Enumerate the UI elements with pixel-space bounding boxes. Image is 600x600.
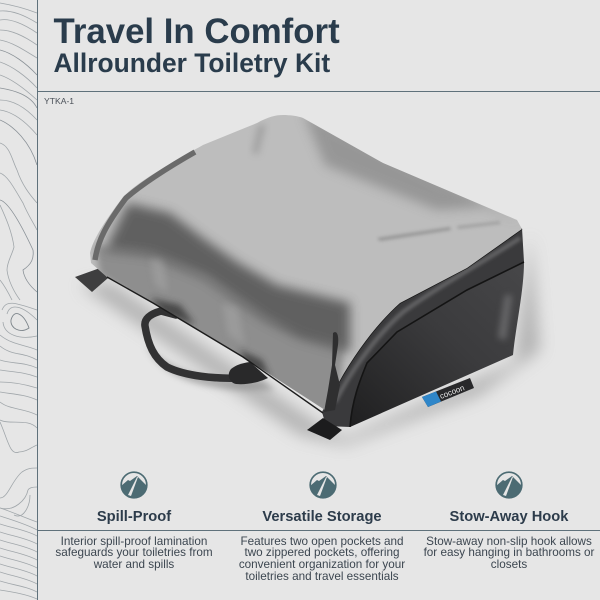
- heading: spill-proof: Spill-Proof: [97, 508, 171, 524]
- heading: versatile storage: Versatile Storage: [262, 508, 382, 524]
- zipper pull: [324, 332, 340, 412]
- bottom seam: [107, 277, 323, 413]
- heading: stow-away hook: Stow-Away Hook: [450, 508, 568, 524]
- text: versatile storage description: two zippered pockets, offering: [244, 546, 400, 559]
- top panel: [90, 115, 522, 410]
- zipper band: [322, 228, 524, 427]
- cast shadows: [80, 235, 540, 445]
- left seam: [95, 152, 195, 260]
- text: versatile storage description: toiletries and travel essentials: [245, 570, 399, 583]
- text: stow-away hook description: closets: [491, 558, 527, 571]
- top panel shading: [95, 112, 522, 420]
- product photo: toiletry bag: [75, 115, 547, 450]
- brand label: cocoon: [438, 383, 466, 401]
- subtitle: Allrounder Toiletry Kit: [54, 48, 330, 78]
- text: stow-away hook description: Stow-away non-slip hook allows: [426, 534, 592, 548]
- text: spill-proof description: safeguards your toiletries from: [55, 546, 213, 559]
- brand label: [422, 378, 474, 407]
- front strap tab: [307, 418, 342, 440]
- text: versatile storage description: convenient organization for your: [239, 558, 405, 571]
- side panel highlight: [498, 295, 512, 340]
- header rule: [38, 90, 600, 92]
- text: stow-away hook description: [424, 534, 594, 571]
- vertical divider: [37, 0, 38, 600]
- text: stow-away hook description: for easy hanging in bathrooms or: [424, 546, 594, 559]
- carry handle: [145, 311, 268, 384]
- topographic side pattern: [0, 2, 37, 600]
- text: spill-proof description: water and spills: [94, 558, 174, 571]
- left strap tab: [75, 268, 108, 292]
- text: versatile storage description: Features two open pockets and: [240, 534, 404, 548]
- features rule: [38, 530, 600, 531]
- text: spill-proof description: [55, 534, 213, 571]
- product code: YTKA-1: [44, 96, 74, 106]
- text: versatile storage description: [239, 534, 405, 583]
- icon: mountain badge 1: [120, 471, 148, 499]
- icon: mountain badge 3: [495, 471, 523, 499]
- icon: mountain badge 2: [309, 471, 337, 499]
- title: Travel In Comfort: [54, 12, 340, 50]
- text: spill-proof description: Interior spill-proof lamination: [61, 534, 207, 548]
- dark side panel: [350, 262, 524, 427]
